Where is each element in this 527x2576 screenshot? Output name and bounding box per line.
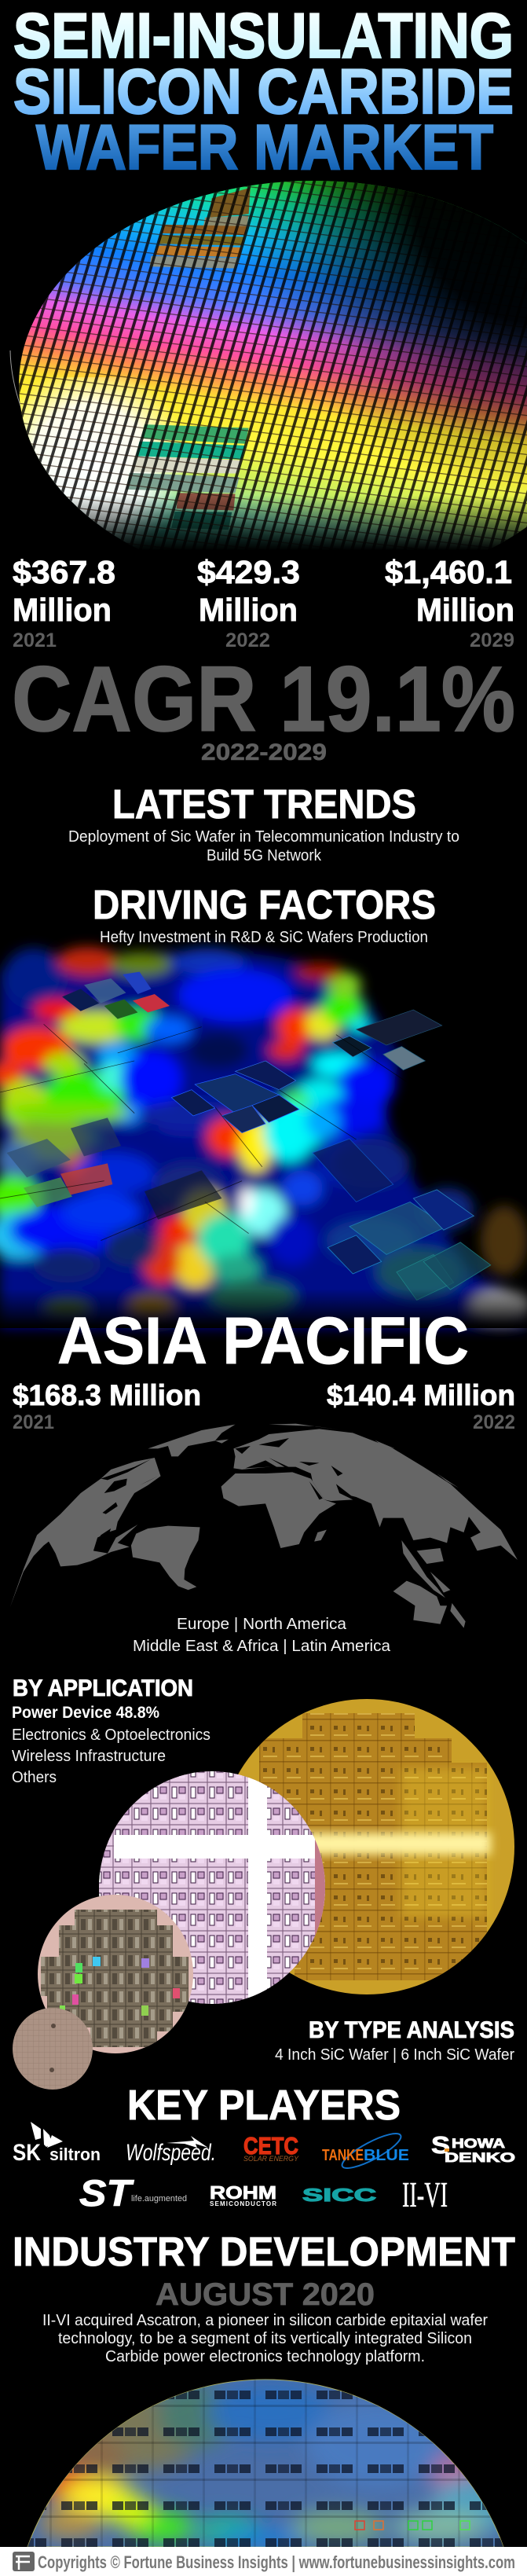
mid wafer [38, 1895, 193, 2053]
industry development: INDUSTRY DEVELOPMENT [13, 2229, 515, 2275]
small wafer [13, 2008, 93, 2090]
stat: 2029 market size: Million [416, 592, 514, 628]
stat: asia pacific 2021: $168.3 Million [13, 1379, 201, 1411]
industry development: AUGUST 2020 [156, 2277, 375, 2312]
logo: ST life.augmented: ST [79, 2172, 135, 2214]
by application: Electronics & Optoelectronics [12, 1727, 210, 1744]
logo: Showa Denko: S [431, 2131, 450, 2159]
logo: Showa Denko [431, 2131, 515, 2165]
stat: asia pacific 2022: 2022 [473, 1411, 515, 1433]
industry development: II-VI acquired Ascatron, a pioneer in silicon carbide epitaxial wafer [42, 2312, 488, 2329]
stat: asia pacific 2022 [327, 1379, 515, 1433]
by application: Wireless Infrastructure [12, 1748, 166, 1765]
industry development [13, 2229, 515, 2365]
CAGR figure: 2022-2029 [201, 739, 327, 765]
by application: Power Device 48.8% [12, 1704, 159, 1722]
logo: Showa Denko: HOWA [452, 2136, 505, 2151]
stat: 2021 market size: 2021 [13, 629, 57, 651]
footer logo [13, 2552, 35, 2571]
logo: SK siltron: siltron [49, 2145, 101, 2164]
stat: 2022 market size: Million [199, 592, 298, 628]
logo: Showa Denko: DENKO [445, 2150, 515, 2165]
stat: asia pacific 2022: $140.4 Million [327, 1379, 515, 1411]
industry development: technology, to be a segment of its vertically integrated Silicon [58, 2330, 472, 2347]
asia pacific heading: ASIA PACIFIC [57, 1304, 469, 1378]
latest trends [68, 782, 459, 864]
logo: ST life.augmented [79, 2172, 187, 2214]
logo: ST life.augmented: life.augmented [131, 2194, 187, 2204]
region list: Middle East & Africa | Latin America [133, 1638, 391, 1655]
logo: SICC: SICC [302, 2185, 376, 2205]
logo: ROHM semiconductor: SEMICONDUCTOR [210, 2200, 276, 2207]
stat: asia pacific 2021 [13, 1379, 201, 1433]
stat: 2021 market size [13, 554, 115, 651]
image: iridescent chip [0, 947, 527, 1328]
driving factors: Hefty Investment in R&D & SiC Wafers Production [100, 929, 428, 946]
stat: 2022 market size [197, 554, 300, 651]
driving factors [93, 883, 436, 946]
industry development: Carbide power electronics technology platform. [105, 2348, 425, 2365]
stat: asia pacific 2021: 2021 [13, 1411, 54, 1433]
purple wafer [94, 1768, 330, 2008]
stat: 2021 market size: Million [13, 592, 112, 628]
stat: 2022 market size: 2022 [225, 629, 270, 651]
logo: Tankeblue: BLUE [364, 2147, 409, 2164]
region list [133, 1616, 391, 1655]
gold wafer [219, 1699, 514, 1994]
latest trends: Build 5G Network [207, 847, 322, 864]
by type analysis: 4 Inch SiC Wafer | 6 Inch SiC Wafer [275, 2046, 514, 2064]
stat: 2021 market size: $367.8 [13, 554, 115, 590]
footer bar [0, 2547, 527, 2576]
logo: SK siltron: SK [13, 2140, 41, 2166]
logo: Wolfspeed: Wolfspeed. [126, 2140, 216, 2166]
world map globe [10, 1424, 518, 1628]
image: rainbow silicon wafer [0, 173, 527, 550]
by application: Others [12, 1769, 57, 1786]
logo: Tankeblue: TANKE [322, 2147, 364, 2164]
region list: Europe | North America [177, 1616, 347, 1633]
key players heading: KEY PLAYERS [127, 2082, 401, 2129]
logo: Tankeblue [322, 2128, 409, 2174]
logo: II-VI: II-VI [402, 2175, 448, 2215]
latest trends: LATEST TRENDS [112, 782, 416, 827]
by application: BY APPLICATION [13, 1675, 193, 1701]
logo: CETC solar energy: CETC [243, 2132, 298, 2160]
stat: 2029 market size [385, 554, 514, 651]
logo: ROHM semiconductor: ROHM [210, 2182, 276, 2203]
logo: SK siltron [13, 2122, 101, 2166]
title [13, 1, 514, 183]
by type analysis [275, 2017, 514, 2064]
by application [12, 1675, 210, 1786]
driving factors: DRIVING FACTORS [93, 883, 436, 928]
stat: 2029 market size: 2029 [470, 629, 514, 651]
image: bottom wafer [27, 2380, 504, 2547]
by type analysis: BY TYPE ANALYSIS [309, 2017, 514, 2043]
logo: Wolfspeed [126, 2136, 216, 2166]
logo: ROHM semiconductor [210, 2182, 276, 2207]
stat: 2029 market size: $1,460.1 [385, 554, 512, 590]
latest trends: Deployment of Sic Wafer in Telecommunication Industry to [68, 828, 459, 846]
stat: 2022 market size: $429.3 [197, 554, 300, 590]
logo: CETC solar energy: SOLAR ENERGY [243, 2155, 299, 2163]
